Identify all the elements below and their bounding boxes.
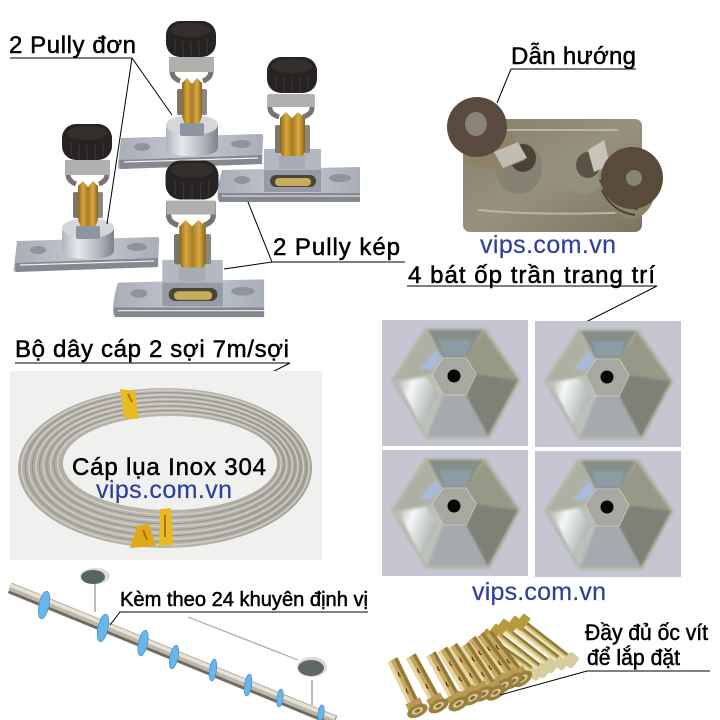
pulley: double, right <box>218 57 360 202</box>
wires <box>95 584 312 705</box>
panel: guide bracket <box>447 97 663 232</box>
label: 2 Pully kép: 2 Pully kép <box>273 234 400 261</box>
label: 2 Pully đơn: 2 Pully đơn <box>9 32 136 59</box>
guide wheel left <box>447 97 527 170</box>
label: 2 Pully đơn <box>9 32 172 224</box>
label: Kèm theo 24 khuyên định vị <box>110 589 368 625</box>
guide plate <box>463 119 642 232</box>
label: Đầy đủ ốc vít để lắp đặt: để lắp đặt <box>587 645 680 670</box>
blue rings <box>36 590 325 720</box>
label: 2 Pully kép <box>224 202 405 269</box>
pulley: double, front <box>113 161 264 317</box>
label: Đầy đủ ốc vít để lắp đặt <box>500 620 710 695</box>
cover 3 <box>382 450 528 576</box>
caption: Cáp lụa Inox 304: Cáp lụa Inox 304 <box>72 454 266 481</box>
panel: hexagon ceiling covers <box>382 320 681 577</box>
cover 2 <box>535 321 681 447</box>
rail <box>10 585 335 720</box>
cover 4 <box>535 451 681 577</box>
label: Bộ dây cáp 2 sợi 7m/sợi <box>15 336 290 394</box>
guide domes <box>496 142 606 194</box>
label: 4 bát ốp trần trang trí: 4 bát ốp trần trang trí <box>408 262 655 289</box>
pulley: single, left <box>14 124 159 272</box>
watermark: vips.com.vn lower: vips.com.vn <box>472 578 606 606</box>
pulley: single, top <box>118 21 263 169</box>
label: Dẫn hướng: Dẫn hướng <box>511 43 636 70</box>
front anchors <box>383 627 535 720</box>
ceiling disks <box>80 568 327 677</box>
watermark: vips.com.vn cable: vips.com.vn <box>96 476 232 504</box>
cover 1 <box>382 320 528 446</box>
rear bolts <box>477 613 581 683</box>
label: Đầy đủ ốc vít để lắp đặt: Đầy đủ ốc vít <box>585 620 708 645</box>
label: 4 bát ốp trần trang trí <box>407 262 657 325</box>
panel: cable coil photo <box>10 371 322 560</box>
panel: rail with positioning rings <box>10 568 335 720</box>
panel: pulley assemblies <box>14 21 360 317</box>
panel: screws <box>383 613 581 720</box>
guide wheel right <box>588 140 663 220</box>
watermark: vips.com.vn top: vips.com.vn <box>480 231 616 259</box>
label: Bộ dây cáp 2 sợi 7m/sợi: Bộ dây cáp 2 sợi 7m/sợi <box>15 336 289 363</box>
yellow bands <box>120 389 173 548</box>
label: Dẫn hướng <box>497 43 636 103</box>
cable coil <box>18 388 312 548</box>
label: Kèm theo 24 khuyên định vị: Kèm theo 24 khuyên định vị <box>120 589 368 611</box>
